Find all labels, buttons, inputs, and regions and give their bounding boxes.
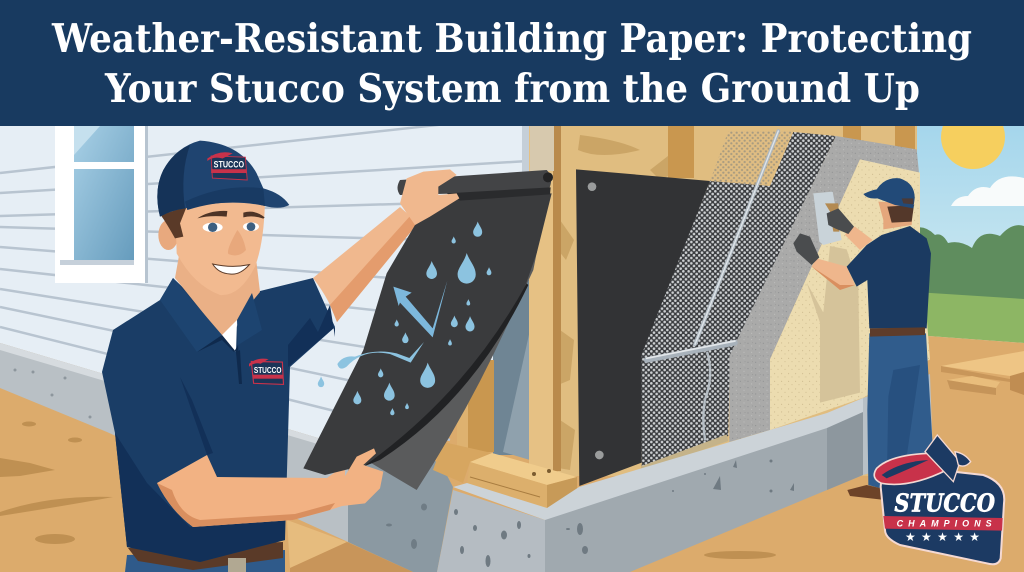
icon: cloud xyxy=(951,176,1024,206)
paper roll xyxy=(397,170,551,195)
logo subtitle: CHAMPIONS xyxy=(897,518,992,528)
sleeve shadow xyxy=(288,305,335,367)
hair xyxy=(161,207,187,238)
glove holding trowel xyxy=(827,208,854,234)
ear xyxy=(158,220,178,250)
ground xyxy=(0,126,1024,572)
belt xyxy=(128,542,283,570)
right wall layers: paper, mesh, scratch coat, stucco xyxy=(576,131,930,486)
logo stars: ★★★★★ xyxy=(905,530,985,544)
jeans xyxy=(125,550,285,572)
stud xyxy=(843,126,861,146)
shirt xyxy=(102,278,335,562)
lumber pile xyxy=(941,351,1024,395)
logo: Stucco Champions xyxy=(874,435,1004,564)
neck xyxy=(175,250,260,350)
raised arm xyxy=(313,207,418,322)
window xyxy=(55,126,148,283)
water deflection arrow xyxy=(393,281,447,337)
cap badge: STUCCO xyxy=(214,159,244,169)
shirt badge: STUCCO xyxy=(254,366,282,375)
left forearm xyxy=(157,455,345,527)
lower arm xyxy=(812,258,855,290)
logo trowel xyxy=(925,435,960,482)
nose xyxy=(228,230,246,255)
background worker xyxy=(793,178,933,500)
main technician body xyxy=(102,250,345,572)
glove on wall xyxy=(793,233,819,265)
jeans xyxy=(867,333,933,490)
finish stucco xyxy=(770,159,930,430)
main sheet xyxy=(303,193,552,475)
logo wordmark: STUCCO xyxy=(894,489,995,518)
neck and head xyxy=(878,202,913,229)
lighter flap xyxy=(372,193,548,490)
siding wall xyxy=(0,115,530,447)
upper tan mesh xyxy=(710,131,793,186)
sheet fold xyxy=(363,283,528,467)
sleeve fold xyxy=(180,377,213,455)
bottom hand xyxy=(337,448,383,507)
worker shadow on wall xyxy=(807,246,860,403)
collars xyxy=(160,278,222,352)
cap xyxy=(157,141,289,217)
cap xyxy=(863,178,915,208)
logo swoosh xyxy=(874,453,947,484)
hair xyxy=(887,205,914,223)
tree line xyxy=(915,225,1024,300)
upper arm to trowel xyxy=(845,227,873,250)
lath tan edge xyxy=(642,434,728,471)
casing bead xyxy=(647,131,778,439)
shirt xyxy=(847,226,931,328)
hands on paper xyxy=(337,169,459,507)
building paper sheet with droplets xyxy=(303,170,553,490)
scene: background sky and landscape xyxy=(915,105,1024,572)
icon: sun xyxy=(941,105,1005,169)
sill plate xyxy=(433,442,577,508)
logo shield xyxy=(881,465,1004,564)
wall framing and sheathing xyxy=(457,126,917,476)
undershirt xyxy=(222,320,237,352)
concrete foundation front xyxy=(437,374,933,572)
boot xyxy=(847,485,888,500)
metal lath mesh xyxy=(642,132,836,470)
eyes xyxy=(203,223,223,232)
title: Your Stucco System from the Ground Up xyxy=(104,66,920,112)
stud xyxy=(895,126,915,150)
scratch coat xyxy=(729,136,919,442)
ground patches xyxy=(0,417,1024,559)
stud xyxy=(668,126,694,178)
grass xyxy=(915,292,1024,343)
top hand xyxy=(400,169,459,225)
placket xyxy=(236,350,242,384)
foundation left xyxy=(0,343,453,572)
face xyxy=(175,193,265,295)
recess behind paper xyxy=(493,280,533,455)
sand beyond wall xyxy=(915,335,1024,572)
droplets xyxy=(318,221,491,415)
cap badge xyxy=(207,152,247,180)
logo banner xyxy=(883,516,1003,531)
building paper on wall xyxy=(576,169,710,486)
post xyxy=(529,126,561,471)
belt xyxy=(870,327,925,337)
inner stud xyxy=(457,360,494,452)
technician head and cap xyxy=(157,141,289,295)
title band xyxy=(0,0,1024,126)
water run-off splash xyxy=(337,342,424,369)
eyebrows xyxy=(197,211,227,218)
body shadow xyxy=(115,433,285,562)
smile xyxy=(213,264,249,274)
trowel xyxy=(813,192,842,245)
shirt badge xyxy=(249,359,284,384)
